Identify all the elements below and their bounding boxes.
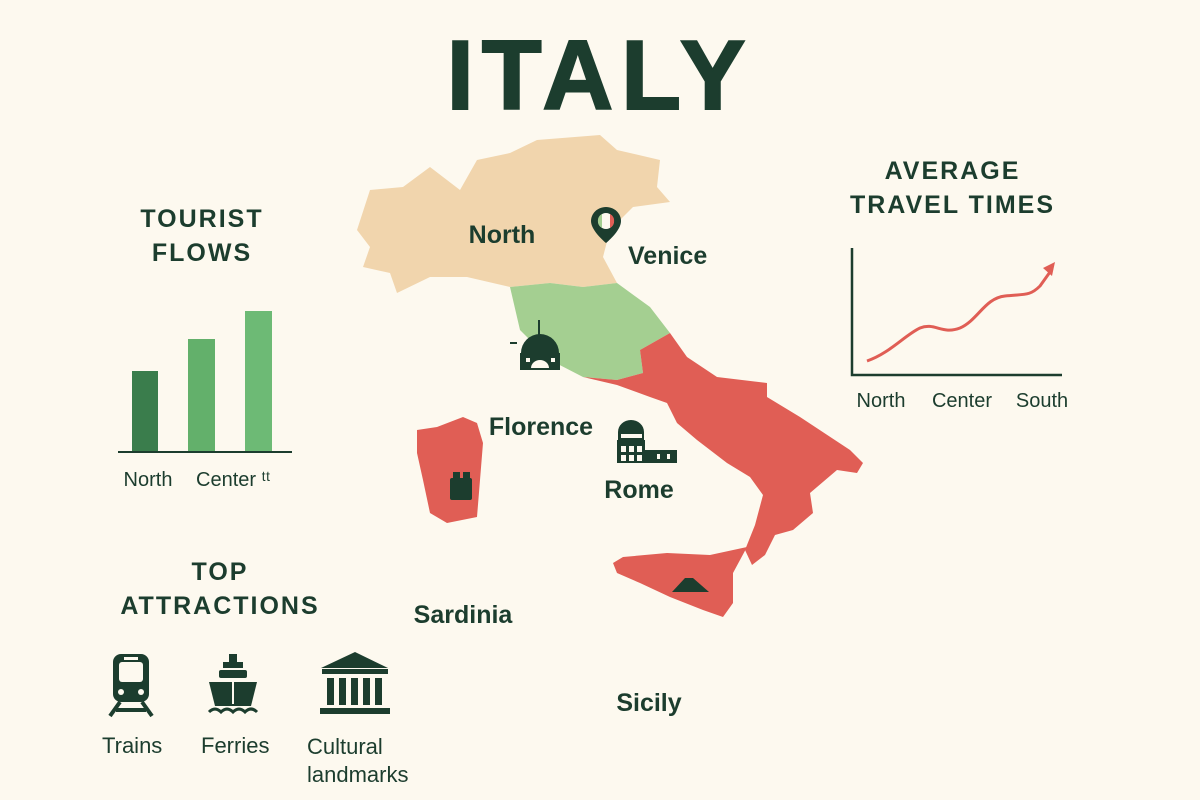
- region: Sicily: [613, 547, 747, 617]
- heading: top attractions: [120, 558, 320, 620]
- icon: colosseum: [617, 420, 677, 463]
- line chart: travel times: North: [857, 390, 905, 412]
- heading: top attractions: TOP: [192, 558, 248, 586]
- line chart: travel times: South: [1016, 390, 1068, 412]
- bar chart: tourist flows: [118, 311, 292, 491]
- region: North: [357, 135, 670, 293]
- line chart: travel times: [850, 248, 1068, 412]
- heading: average travel times: TRAVEL TIMES: [850, 191, 1055, 219]
- heading: top attractions: ATTRACTIONS: [120, 592, 320, 620]
- icon: volcano: [672, 578, 709, 592]
- icon: florence dome: [510, 320, 560, 370]
- heading: tourist flows: [140, 205, 264, 267]
- label: Florence: Florence: [489, 413, 593, 441]
- heading: tourist flows: TOURIST: [140, 205, 264, 233]
- label: Ferries: Ferries: [201, 733, 269, 758]
- label: Rome: Rome: [604, 476, 674, 504]
- region: Sardinia: [417, 417, 483, 523]
- region: South: [583, 333, 863, 565]
- label: cultural landmarks: Cultural: [307, 734, 383, 759]
- line chart: travel times: Center: [932, 390, 992, 412]
- label: cultural landmarks: landmarks: [307, 762, 408, 787]
- region: North: North: [469, 221, 535, 249]
- icon: venice pin: [591, 207, 621, 243]
- label: Venice: Venice: [628, 242, 707, 270]
- heading: average travel times: AVERAGE: [885, 157, 1020, 185]
- title: ITALY: [447, 20, 753, 130]
- label: Trains: Trains: [102, 733, 162, 758]
- heading: average travel times: [850, 157, 1055, 219]
- bar chart: tourist flows: North: [124, 469, 172, 491]
- label: cultural landmarks: [307, 734, 408, 787]
- icon: train: [108, 654, 154, 718]
- icon: nuraghe: [450, 472, 472, 500]
- icon: temple: [320, 652, 390, 714]
- bar chart: tourist flows: Center ᵗᵗ: [196, 469, 270, 491]
- label: Sicily: Sicily: [616, 689, 682, 717]
- heading: tourist flows: FLOWS: [152, 239, 252, 267]
- label: Sardinia: Sardinia: [414, 601, 513, 629]
- icon: ferry: [208, 654, 258, 714]
- region: Center: [510, 283, 670, 380]
